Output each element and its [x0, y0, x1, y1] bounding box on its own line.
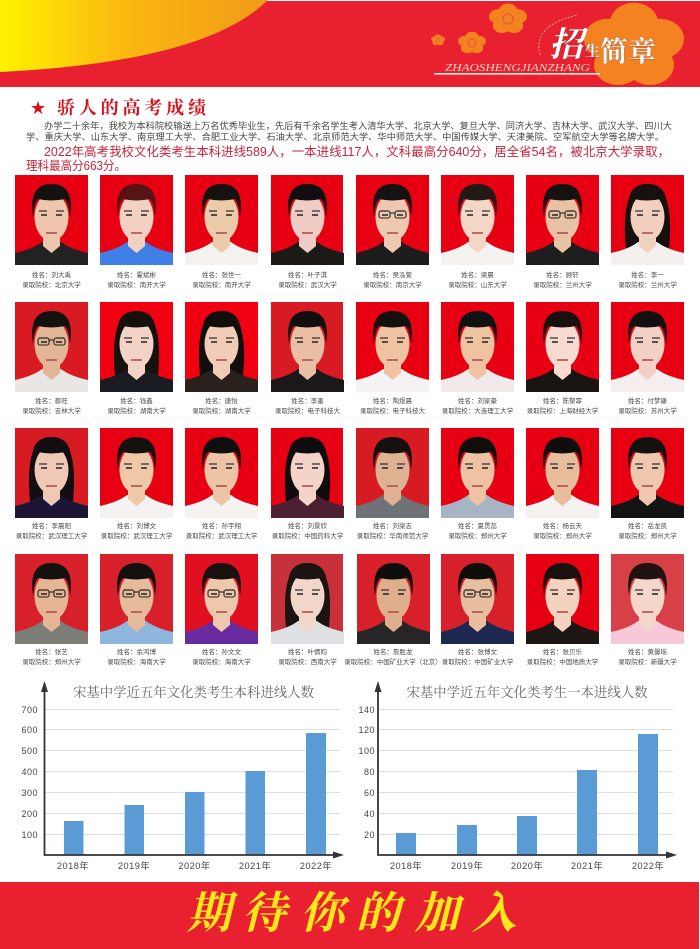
student: 刘大禹: 录取院校：北京大学 [22, 280, 81, 289]
student: 孙文文 [185, 554, 258, 666]
heading: ★ [30, 98, 46, 119]
y axis labels [21, 705, 38, 840]
header banner [0, 0, 700, 87]
x axis labels: 2019年 [451, 860, 483, 871]
x axis labels: 2022年 [300, 860, 332, 871]
footer slogan [187, 877, 517, 941]
student: 张世一: 姓名：张世一 [202, 270, 242, 279]
chart title: 宋基中学近五年文化类考生本科进线人数 [73, 682, 315, 701]
footer slogan: 的 [356, 877, 406, 941]
student: 李一: 姓名：李一 [631, 270, 664, 279]
student: 余鸿博: 姓名：余鸿博 [117, 647, 156, 656]
axes [374, 681, 677, 858]
student: 付梦康 [611, 302, 684, 415]
student: 张艺 [15, 554, 88, 666]
student: 詹胜龙: 录取院校：中国矿业大学（北京） [344, 657, 442, 666]
student: 夏贯蕊: 姓名：夏贯蕊 [458, 521, 498, 530]
student: 杨云天: 姓名：杨云天 [543, 521, 582, 530]
student: 蔡旺: 录取院校：吉林大学 [22, 406, 81, 415]
student: 张贝乐: 姓名：张贝乐 [543, 647, 582, 656]
student: 顾轩: 姓名：顾轩 [546, 270, 579, 279]
student: 刘家豪: 录取院校：大连理工大学 [442, 406, 514, 415]
student: 刘博文 [100, 428, 173, 540]
banner pinyin: ZHAOSHENGJIANZHANG [445, 63, 590, 74]
student: 刘景欣: 姓名：刘景欣 [288, 521, 328, 530]
student: 蔡旺 [15, 302, 88, 415]
student: 唐怡: 姓名：唐怡 [205, 396, 238, 405]
student: 张博文: 录取院校：中国矿业大学 [442, 657, 514, 666]
student: 吴泓萱 [356, 175, 429, 289]
student: 孙文文: 姓名：孙文文 [202, 647, 242, 656]
student: 陈黎霏: 姓名：陈黎霏 [543, 396, 582, 405]
student: 叶子淇: 姓名：叶子淇 [288, 270, 328, 279]
student: 李墨 [271, 302, 344, 415]
student: 霍斌彬 [100, 175, 173, 289]
y axis labels: 300 [21, 788, 38, 798]
student: 蔡旺: 姓名：蔡旺 [35, 396, 68, 405]
banner title [549, 17, 656, 70]
student: 李墨: 姓名：李墨 [291, 396, 324, 405]
y axis labels: 60 [364, 788, 375, 798]
student: 孙文文: 录取院校：海南大学 [192, 657, 251, 666]
student: 夏贯蕊 [441, 428, 514, 540]
student: 黄馨瑶: 录取院校：新疆大学 [618, 657, 677, 666]
student: 付梦康: 姓名：付梦康 [628, 396, 668, 405]
student: 李晨阳 [15, 428, 88, 540]
student: 夏贯蕊: 录取院校：郑州大学 [448, 531, 507, 540]
x axis labels [57, 860, 332, 871]
bars [396, 734, 658, 855]
x axis labels: 2020年 [511, 860, 543, 871]
yellow swoosh [0, 0, 268, 72]
x axis labels: 2021年 [571, 860, 603, 871]
student: 詹胜龙 [344, 554, 442, 666]
student: 陶煜晨: 姓名：陶煜晨 [373, 396, 412, 405]
student: 叶倩昀: 姓名：叶倩昀 [288, 647, 328, 656]
student: 梁晨 [441, 175, 514, 289]
intro paragraph: 学、重庆大学、山东大学、南京理工大学、合肥工业大学、石油大学、北京师范大学、华中师范大学、中国传媒大学、天津美院、空军航空大学等名牌大学。 [26, 131, 664, 142]
student: 杨云天: 录取院校：郑州大学 [533, 531, 592, 540]
footer slogan: 加 [414, 877, 465, 941]
y axis labels: 700 [21, 705, 38, 715]
student: 刘梁志: 姓名：刘梁志 [373, 521, 412, 530]
student: 陶煜晨 [356, 302, 429, 415]
axes [41, 681, 344, 858]
student: 刘梁志 [356, 428, 429, 540]
student: 张世一 [185, 175, 258, 289]
y axis labels: 200 [21, 809, 38, 819]
student: 杨云天 [526, 428, 599, 540]
bars [64, 733, 326, 855]
y axis labels: 40 [364, 809, 375, 819]
footer slogan: 待 [242, 877, 291, 941]
x axis labels: 2020年 [178, 860, 211, 871]
student: 唐怡: 录取院校：湖南大学 [192, 406, 251, 415]
student: 钱鑫: 姓名：钱鑫 [120, 396, 153, 405]
student: 黄馨瑶 [611, 554, 684, 666]
footer slogan: 入 [472, 877, 517, 941]
y axis labels: 80 [364, 767, 375, 777]
y axis labels: 100 [358, 746, 375, 756]
highlighted results text [26, 144, 670, 173]
footer slogan: 你 [300, 877, 350, 941]
heading: 骄人的高考成绩 [57, 94, 207, 120]
flower decorations [431, 3, 684, 85]
student: 岳龙凯: 录取院校：郑州大学 [618, 531, 677, 540]
student: 吴泓萱: 姓名：吴泓萱 [373, 270, 412, 279]
student: 刘梁志: 录取院校：华南师范大学 [357, 531, 429, 540]
student: 陶煜晨: 录取院校：电子科技大 [360, 406, 426, 415]
student: 刘景欣 [271, 428, 344, 540]
y axis labels: 100 [21, 830, 38, 840]
student: 孙宇翔 [185, 428, 258, 540]
student: 刘大禹 [15, 175, 88, 289]
highlighted results text: 理科最高分663分。 [26, 158, 126, 173]
student: 余鸿博 [100, 554, 173, 666]
x axis labels: 2021年 [239, 860, 271, 871]
student: 张贝乐: 录取院校：中国地质大学 [527, 657, 599, 666]
student: 叶倩昀: 录取院校：西南大学 [278, 657, 337, 666]
student: 张艺: 录取院校：郑州大学 [22, 657, 81, 666]
y axis labels: 400 [21, 767, 38, 777]
student: 刘景欣: 录取院校：中国药科大学 [272, 531, 344, 540]
student: 刘家豪 [441, 302, 514, 415]
student: 叶倩昀 [271, 554, 344, 666]
student: 钱鑫: 录取院校：湖南大学 [107, 406, 166, 415]
student: 张博文 [441, 554, 514, 666]
student: 钱鑫 [100, 302, 173, 415]
student: 孙宇翔: 姓名：孙宇翔 [202, 521, 242, 530]
footer slogan: 期 [187, 877, 238, 941]
student: 张贝乐 [526, 554, 599, 666]
student: 李晨阳: 姓名：李晨阳 [32, 521, 71, 530]
student: 付梦康: 录取院校：苏州大学 [618, 406, 677, 415]
student: 梁晨: 姓名：梁晨 [461, 270, 494, 279]
x axis labels: 2018年 [57, 860, 89, 871]
highlighted results text: 2022年高考我校文化类考生本科进线589人，一本进线117人，文科最高分640分，居全省54名，被北京大学录取， [44, 144, 670, 159]
student: 李一 [611, 175, 684, 289]
student: 霍斌彬: 录取院校：南开大学 [107, 280, 166, 289]
y axis labels: 500 [21, 746, 38, 756]
student: 陈黎霏 [526, 302, 599, 415]
bar chart: 本科进线人数 [21, 681, 344, 871]
student: 黄馨瑶: 姓名：黄馨瑶 [628, 647, 668, 656]
intro paragraph: 办学二十余年，我校为本科院校输送上万名优秀毕业生，先后有千余名学生考入清华大学、北京大学、复旦大学、同济大学、吉林大学、武汉大学、四川大 [44, 120, 672, 131]
y axis labels: 20 [364, 830, 375, 840]
student: 顾轩: 录取院校：兰州大学 [533, 280, 592, 289]
student: 张博文: 姓名：张博文 [458, 647, 498, 656]
banner title: 生 [585, 40, 600, 61]
student: 李墨: 录取院校：电子科技大 [275, 406, 340, 415]
x axis labels: 2018年 [390, 860, 422, 871]
x axis labels: 2019年 [118, 860, 150, 871]
student: 刘大禹: 姓名：刘大禹 [32, 270, 71, 279]
chart title: 宋基中学近五年文化类考生一本进线人数 [406, 682, 648, 701]
student: 叶子淇: 录取院校：武汉大学 [278, 280, 337, 289]
bar chart: 一本进线人数 [358, 681, 677, 871]
intro paragraph [26, 120, 672, 142]
student: 霍斌彬: 姓名：霍斌彬 [117, 270, 156, 279]
x axis labels [390, 860, 664, 871]
student: 刘博文: 录取院校：武汉理工大学 [101, 531, 173, 540]
student: 陈黎霏: 录取院校：上海财经大学 [527, 406, 599, 415]
student photo grid [15, 175, 684, 666]
student: 张世一: 录取院校：南开大学 [192, 280, 251, 289]
student: 李一: 录取院校：兰州大学 [618, 280, 677, 289]
student: 李晨阳: 录取院校：武汉理工大学 [16, 531, 88, 540]
student: 张艺: 姓名：张艺 [35, 647, 68, 656]
banner title: 招 [549, 17, 589, 66]
y axis labels: 600 [21, 725, 38, 735]
banner title: 简章 [600, 30, 656, 70]
student: 唐怡 [185, 302, 258, 415]
x axis labels: 2022年 [632, 860, 664, 871]
student: 孙宇翔: 录取院校：武汉理工大学 [186, 531, 258, 540]
y axis labels: 140 [358, 705, 375, 715]
student: 叶子淇 [271, 175, 344, 289]
footer banner [0, 877, 699, 949]
y axis labels: 120 [358, 725, 375, 735]
student: 余鸿博: 录取院校：海南大学 [107, 657, 166, 666]
student: 岳龙凯: 姓名：岳龙凯 [628, 521, 668, 530]
student: 刘家豪: 姓名：刘家豪 [458, 396, 498, 405]
student: 岳龙凯 [611, 428, 684, 540]
y axis labels [358, 705, 375, 840]
student: 詹胜龙: 姓名：詹胜龙 [374, 647, 413, 656]
student: 刘博文: 姓名：刘博文 [117, 521, 156, 530]
student: 吴泓萱: 录取院校：南京大学 [363, 280, 422, 289]
student: 梁晨: 录取院校：山东大学 [448, 280, 507, 289]
student: 顾轩 [526, 175, 599, 289]
